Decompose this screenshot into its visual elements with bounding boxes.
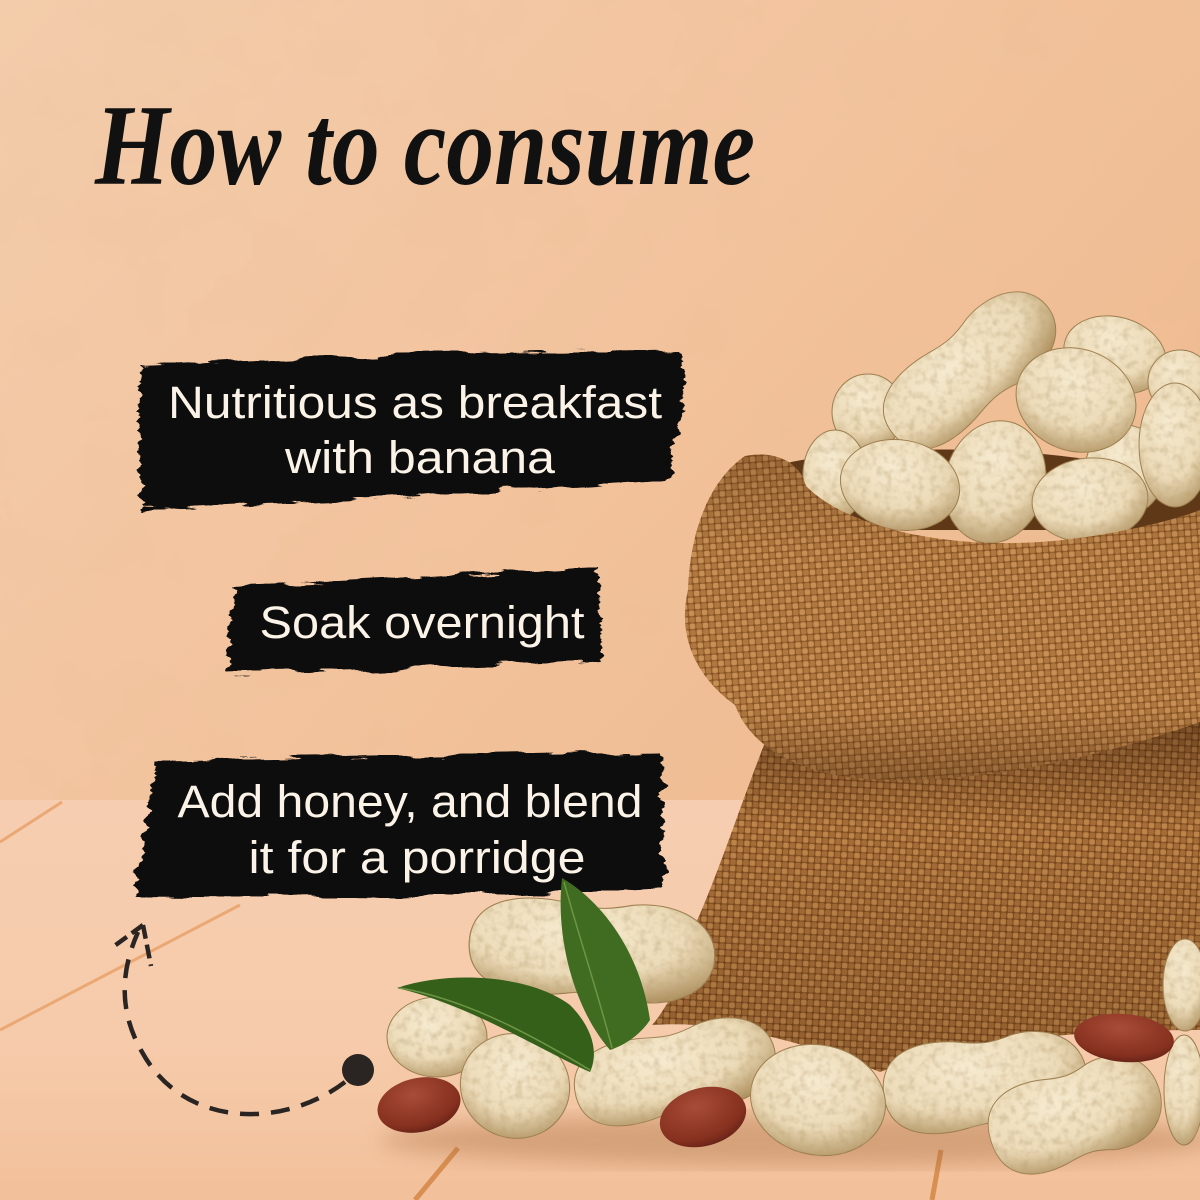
red peanuts xyxy=(372,1010,1176,1156)
title: How to consume xyxy=(94,82,755,210)
background wall xyxy=(0,0,1200,802)
brush panel: breakfast tip xyxy=(138,350,684,510)
brush panel: breakfast tip: with banana xyxy=(284,432,556,483)
ground shadow xyxy=(380,1114,1200,1166)
sack back interior xyxy=(760,450,1200,530)
dashed arrow xyxy=(113,925,374,1114)
burlap sack xyxy=(652,273,1200,1072)
sack lower body xyxy=(652,720,1200,1072)
peanuts inside sack xyxy=(803,273,1200,555)
brush panel: porridge tip: Add honey, and blend xyxy=(178,776,642,827)
green leaves xyxy=(397,878,650,1072)
brush panel: porridge tip: it for a porridge xyxy=(248,832,586,883)
brush panel: soak tip xyxy=(226,568,602,674)
brush panel: breakfast tip: Nutritious as breakfast xyxy=(168,377,663,428)
peanuts pile at front xyxy=(387,893,1200,1186)
wooden floor xyxy=(0,800,1200,1200)
brush panel: soak tip: Soak overnight xyxy=(260,597,585,648)
brush panel: porridge tip xyxy=(136,752,664,898)
sack upper fold xyxy=(685,454,1200,780)
